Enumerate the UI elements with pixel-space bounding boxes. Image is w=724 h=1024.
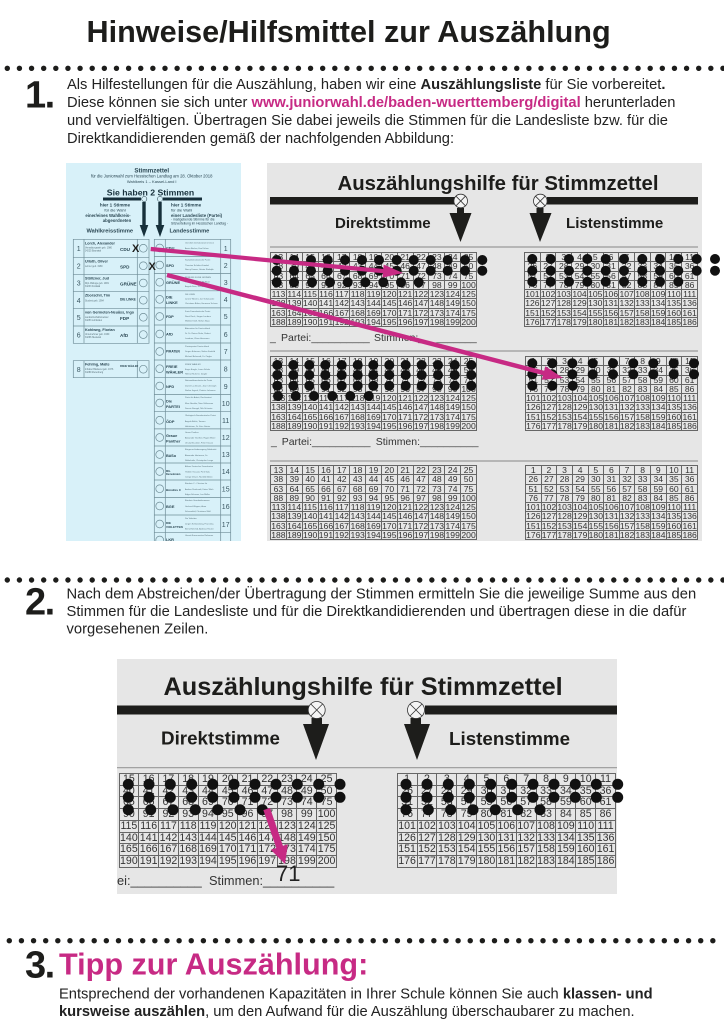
ballot party names: SPD [166,263,174,268]
ballot party details: Stefan Jagsch, Patricia Lehmann [185,389,216,392]
ballot right numbers: 13 [222,452,230,459]
step number 2: 2. [25,582,54,624]
text block: step 1: und vervielfältigen. Übertragen Sie dabei jeweils die Stimmen für die Landesliste bzw. für die [67,111,668,129]
ballot party details: Gerhard Wagner, Anne [185,505,207,508]
ballot right numbers: 10 [222,401,230,408]
ballot party names: WÄHLER [166,370,183,374]
text block: tip: kursweise auszählen, um den Aufwand für die Auszählung überschaubarer zu machen. [59,1004,635,1020]
panel: ballot paper: 34266 Niestetal [85,336,101,339]
ballot party details: Nationaldemokratische Partei [185,379,213,382]
ballot right numbers: 6 [224,332,228,339]
panel: counting aid, step 1 [267,163,702,541]
ballot column explanations: einer/eines Wahlkreis- [85,213,131,218]
ballot column explanations: für die Wahl [171,208,192,212]
ballot heading: Wahlkreis 1 – Kassel-Land I [127,179,177,184]
step number 3: 3. [25,944,54,986]
ballot party names: AfD [166,332,173,336]
ballot left grid [73,239,149,378]
ballot party details: Ökologisch-Demokratische Partei [185,414,216,417]
ballot left candidates: 1 [77,246,81,253]
ballot party details: BÜNDNIS 90/DIE GRÜNEN [185,276,211,279]
counting aid header: Listenstimme [566,215,663,232]
ballot right numbers: 5 [224,314,228,321]
ballot column explanations: einer Landesliste (Partei) [171,213,223,218]
ballot party names [166,246,183,542]
ballot party details: Bündnis C - Christen für [185,482,207,485]
ballot party details: Engin Eroglu, Laura Schulz [185,368,210,371]
tally table: direct votes [119,773,337,868]
ballot right numbers: 17 [222,522,230,529]
ballot party names: DIE [166,294,173,300]
ballot party details: Daniel Lachmann, Jean Christoph [185,384,217,388]
ballot party names: NPD [166,384,174,389]
arrow: total to line [263,808,288,864]
ballot column explanations: Sitzverteilung im Hessischen Landtag - [171,222,228,226]
text block: step 1: Als Hilfestellungen für die Auszählung, haben wir eine Auszählungsliste für Sie vorbereitet. [67,77,665,93]
tally table: list votes middle [525,356,698,431]
counting aid header: Partei:__________ [281,332,370,344]
ballot party details: Bernd Schmid, Andreas Reuter [185,528,214,530]
ballot right numbers: 8 [224,366,228,374]
text block: step 2: Stimmen für die Landesliste und für die Direktkandidierenden und übertragen diese in die dafür [66,604,686,620]
counting aid header: _ [270,436,277,448]
text block: step 2: Nach dem Abstreichen/der Übertragung der Stimmen ermitteln Sie die jeweilige Summe aus den [66,584,696,602]
ballot party details: Dr. Dr. Rainer Rahn, Robert [185,332,211,335]
panel: ballot paper: 34289 Zierenberg [85,371,104,374]
ballot party details: Jürgen Erkmann, Stefan Kaufeld [185,350,216,353]
tally dots [272,254,720,401]
ballot party names: VIOLETTEN [166,525,183,529]
tally table: list votes bottom [525,465,698,540]
ballot right numbers: 4 [224,297,228,304]
counting aid header large: Stimmen:__________ [209,873,335,888]
text block: step 1 [67,77,675,147]
counting aid header [269,173,698,462]
panel: counting aid, step 2 [117,659,617,894]
ballot heading: Sie haben 2 Stimmen [107,188,194,198]
panel: ballot paper: Stöllzner, Jud [85,276,110,280]
counting aid header: Stimmen:__________ [376,436,479,448]
ballot party details: Alexander Günther, Hagen Meier [185,436,216,440]
ballot party names: FDP [166,314,174,319]
step number 1: 1. [25,74,54,116]
text block: step 2: vorgesehenen Zeilen. [66,621,208,637]
ballot party details: Marc Breuller, Nina Völkerman [185,402,214,405]
ballot right numbers: 1 [224,246,228,253]
ballot party details: Helmut Ruhl, Dr. Ziegler [185,372,207,376]
ballot column explanations: für die Wahl [104,208,126,212]
ballot party details: Piratenpartei Deutschland [185,345,210,348]
ballot right grid [154,239,231,560]
ballot party names: FREIE [166,364,178,369]
ballot party details: Armin Becker, Eva Kühne [185,247,210,250]
ballot heading [91,168,213,198]
ballot party names: Bündnis C [166,488,182,492]
counting aid header: Stimmen:__________ [374,332,477,344]
ballot party details: Schoenfeld, Christiane Wolf [185,510,211,513]
panel: ballot paper: Lorch, Alexander [85,242,116,246]
ballot party details: René Rock, Jürgen Lenders [185,315,211,318]
counting aid header: _ [269,332,276,344]
panel: ballot paper: SPD [120,264,130,270]
ballot right numbers: 2 [224,263,228,270]
tip heading: Tipp zur Auszählung: [59,947,368,981]
ballot party names: PIRATEN [166,350,180,354]
panel: ballot paper: Dipl.-Biologe geb. 1981 [85,283,110,285]
ballot party details: Dennis Stengel, Nils Schuster [185,407,213,410]
panel: ballot paper: DIE LINKE [120,298,136,302]
counting aid header: Partei:__________ [282,436,371,448]
ballot party names: ÖDP [166,419,175,424]
ballot heading: für die Juniorwahl zum Hessischen Landtag am 28. Oktober 2018 [91,174,213,178]
ballot party names: DIE [166,521,171,525]
ballot party details: Nikkolaidis, Christopher Lange [185,459,214,462]
panel: ballot paper: Unternehmer geb. 1960 [85,333,110,336]
ballot party details: Alternative für Deutschland [185,327,211,330]
panel: ballot paper: 34253 Lohfelden [85,320,103,322]
panel: ballot paper: Student geb. 1994 [85,300,104,302]
ballot party details: Michael Boddenberg [185,251,205,254]
ballot party details: Partei für Arbeit, Rechtsstaat [185,396,212,399]
ballot party details: Bürgerrechtsbewegung Solidarität [185,448,217,451]
panel: ballot paper: 34233 Fuldatal [85,285,101,288]
ballot party details: Holtzleiner, Dr. Kein Günter [185,425,210,428]
ballot party details: Alexander Hartmann, Ilo [185,454,208,457]
ballot party details: Nancy Faeser, Günter Rudolph [185,268,214,271]
tally table: list votes top [524,252,698,327]
ballot party details [185,242,218,537]
ballot party names: BGE [166,504,175,509]
ballot right numbers: 14 [222,469,230,476]
ballot left candidates: 3 [77,281,81,288]
panel: ballot paper: CDU [120,247,131,252]
ballot right numbers: 16 [222,504,230,511]
ballot party details: Sozialdemokratische Partei [185,258,211,262]
ballot left candidates: 8 [77,367,81,374]
counting aid header large: Direktstimme [161,728,280,748]
ballot party names: Demokraten [166,473,181,476]
ballot party details: Michael Behrendt, Dr. Ziegler [185,355,212,358]
ballot heading: Stimmzettel [134,168,169,174]
text block: tip: Entsprechend der vorhandenen Kapazitäten in Ihrer Schule können Sie auch klassen- und [59,986,653,1002]
ballot column explanations: - maßgebende Stimme für die [171,218,215,222]
ballot left candidates [77,246,81,374]
ballot party details: Cengiz Dinçer, Nurullah Aslan [185,476,213,478]
panel: ballot paper: Lehrer geb. 1980 [85,265,103,268]
ballot party details: Christlich Demokratische Union [185,242,215,244]
ballot party names: MG- [166,470,171,473]
ballot crosses: X [132,243,140,255]
ballot right numbers: 9 [224,384,228,391]
ballot party details: Freie Demokratische Partei [185,310,211,313]
ballot right numbers: 3 [224,280,228,287]
ballot party details: Bündnis Grundeinkommen [185,499,210,502]
arrow: list vote to tally [166,272,563,380]
ballot right numbers: 11 [222,418,229,425]
tally table: direct votes bottom [270,465,477,540]
ballot party details: Lambrou, Klaus Herrmann [185,337,210,340]
panel: ballot paper [66,163,241,541]
counting aid header: Auszählungshilfe für Stimmzettel [338,173,659,195]
handwritten total 71: 71 [276,861,300,886]
ballot crosses: X [148,261,156,273]
ballot party names: Panther [166,438,181,444]
ballot party details: Priska Hinz, Tarek Al-Wazir [185,280,210,284]
panel: ballot paper: 34225 Baunatal [85,250,102,252]
ballot party details: FREIE WÄHLER [185,363,201,366]
counting aid header large: ei:__________ [117,873,203,888]
title: Hinweise/Hilfsmittel zur Auszählung [86,15,611,49]
ballot party details: Thorsten Schäfer-Gümbel [185,264,209,267]
panel: ballot paper: FREIE WÄHLER [120,365,138,368]
ballot party names: GRÜNE [166,280,180,285]
ballot crosses [132,243,156,273]
ballot party details: Ursula Bruckner, Peter Krause [185,442,214,444]
ballot party details: Angela Bohle, Tamara [185,420,206,423]
ballot party details: Christiane Böhm, Hermann Schaus [185,302,218,305]
ballot column explanations: abgeordneten [103,218,132,223]
ballot column explanations [85,202,228,234]
ballot party details: Allianz Deutscher Demokraten [185,465,214,468]
ballot arrows [103,196,202,237]
counting aid header large [117,673,617,888]
ballot party names: PARTEI [166,404,180,409]
panel: ballot paper: GRÜNE [120,280,137,286]
ballot party names: LINKE [166,300,178,305]
ballot party details: DIE LINKE [185,294,196,296]
ballot party details: Liberal-Konservative Reformer [185,534,213,537]
counting aid header: Direktstimme [335,215,431,232]
ballot column explanations: hier 1 Stimme [171,202,202,208]
counting aid header large: Auszählungshilfe für Stimmzettel [164,673,563,701]
ballot right numbers: 7 [224,349,228,356]
ballot party details: Jürgen Schlossberg, Franziska [185,522,214,526]
ballot party details: Yildirim Yavuzer, Ferit Sula [185,470,211,474]
tally dots [122,778,624,816]
ballot right numbers: 15 [222,486,230,494]
ballot party details: Die Violetten [185,517,198,520]
text block: step 1: Diese können sie sich unter www.juniorwahl.de/baden-wuerttemberg/digital herunterladen [67,95,675,111]
ballot column explanations: Landesstimme [170,228,209,234]
ballot party details: Janine Wissler, Jan Schalauske [185,298,215,300]
ballot left candidates: 2 [77,264,81,270]
tally table: list votes [397,773,616,868]
panel: ballot paper: Inhaber Bäckerei geb. 1976 [85,368,114,371]
ballot right numbers: 12 [222,435,230,442]
ballot left candidates: 5 [77,315,81,322]
panel: ballot paper: Zborschil, Tim [85,294,111,298]
ballot party details: Angela Dorn, Kai Klose [185,285,207,288]
panel: ballot paper: FDP [120,316,129,321]
ballot party names: CDU [166,246,175,250]
ballot party names: Die [166,398,173,404]
tally table: direct votes middle [270,356,477,431]
ballot right numbers [222,246,230,529]
panel: ballot paper: Kohlweg, Florian [85,328,115,332]
ballot party names: Graue [166,433,178,438]
ballot party details: Edgar Schwarz, Leo Müller [185,493,210,496]
panel: ballot paper: Landwirtschaftsmeister [85,316,109,319]
ballot column explanations: hier 1 Stimme [100,202,131,208]
counting aid header large: Listenstimme [449,728,570,749]
panel: ballot paper: von Germeten-Neuåss, Ingo [85,311,135,315]
ballot left candidates: 6 [77,332,81,339]
dotted separator top [4,66,724,71]
text block: step 2 [66,584,696,637]
arrow: direct vote to tally [150,246,403,278]
panel: ballot paper: AfD [120,333,129,338]
panel: ballot paper: Verwaltungswirt geb. 1980 [85,246,113,250]
ballot party details: Wiebke Knell, Stefan Naas [185,320,210,322]
panel: ballot paper: Ulloth, Oliver [85,260,109,264]
ballot party details: Andrea Reinhardt, Dieter Wirth [185,488,214,491]
panel: ballot paper: Fehling, Malte [85,362,110,366]
tally table: direct votes top [270,252,477,327]
ballot party names: BüSo [166,453,177,458]
ballot party details: Graue Panther [185,431,199,434]
ballot column explanations: Wahlkreisstimme [86,228,133,234]
dotted separator middle [4,577,724,583]
ballot left candidates: 4 [77,298,81,305]
text block: step 1: Direktkandidierenden gemäß der nachfolgenden Abbildung: [67,131,454,147]
